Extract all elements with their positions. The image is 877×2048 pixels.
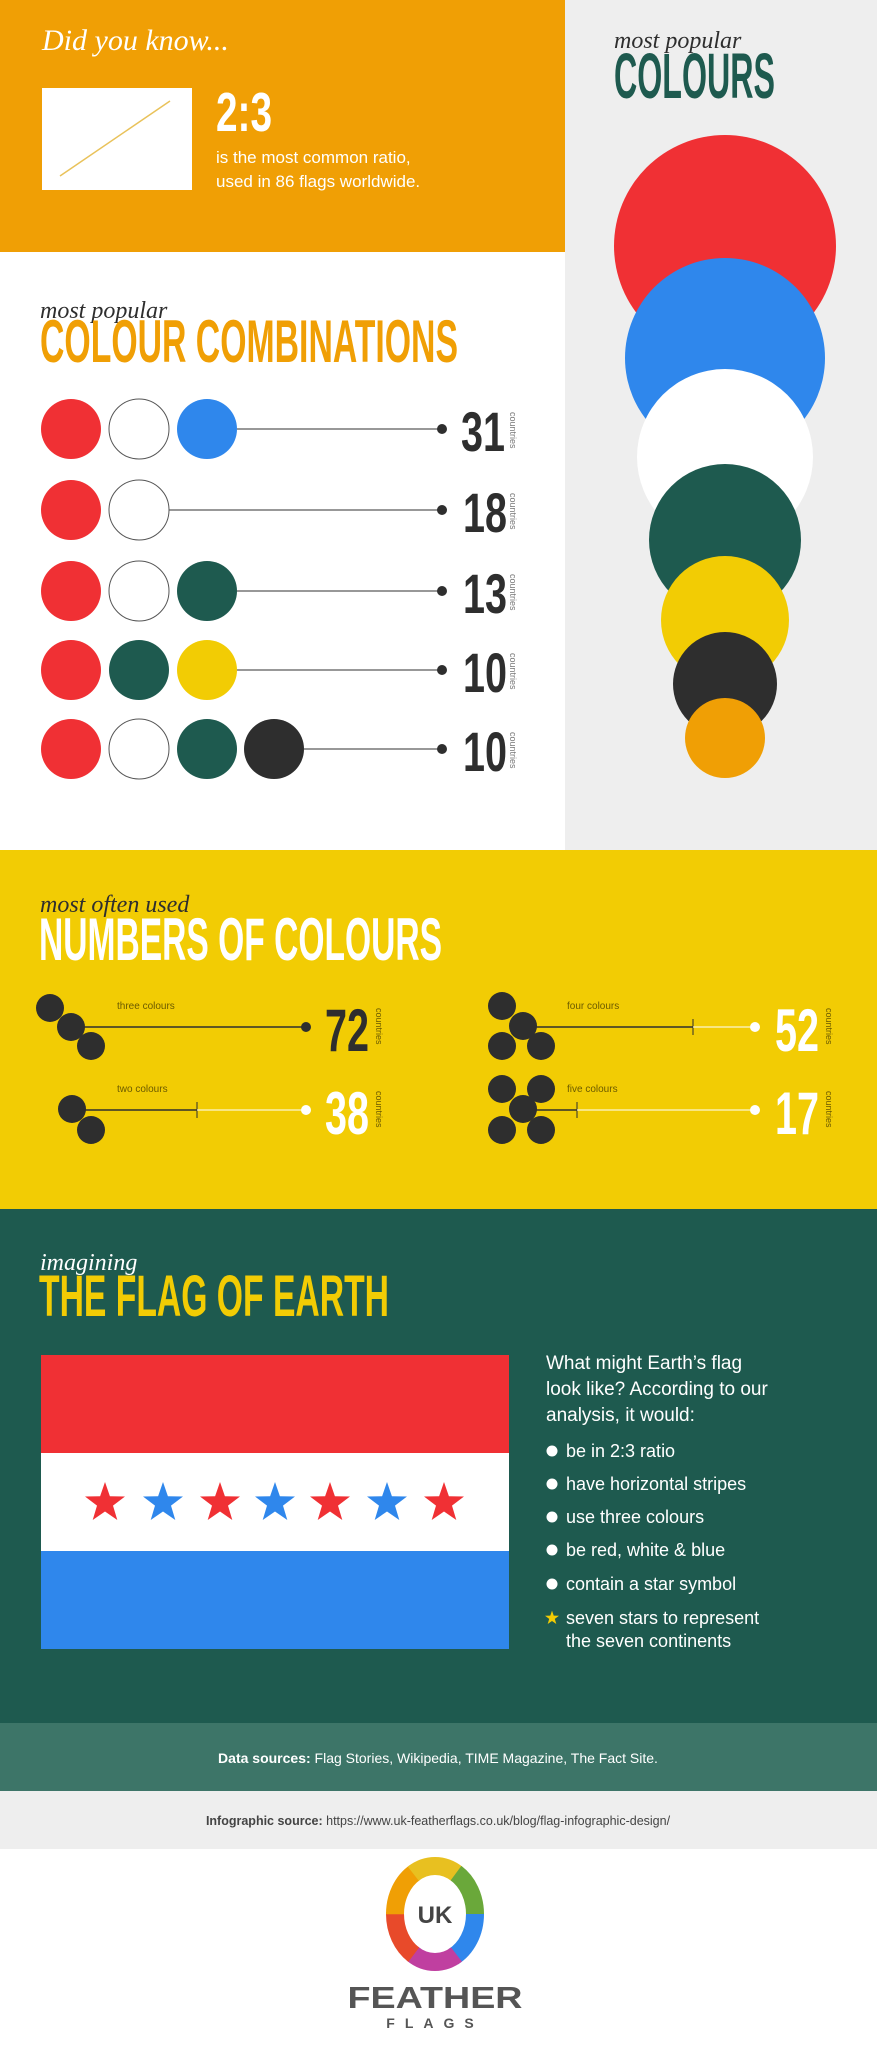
chart: stacked colour circles bbox=[614, 135, 836, 778]
row: five colours 17: five colours bbox=[567, 1084, 618, 1095]
row: four colours 52: 52 bbox=[775, 997, 819, 1064]
panel: colour combinations bbox=[40, 298, 518, 783]
row: three colours 72 bbox=[36, 994, 384, 1064]
text: flag description and list: be red, white & blue bbox=[566, 1540, 725, 1560]
heading: numbers of colours bbox=[39, 892, 442, 973]
row: red white green black 10 bbox=[41, 719, 518, 783]
stat: 2:3: 2:3 bbox=[216, 81, 272, 143]
heading: colour combinations bbox=[40, 298, 458, 375]
heading: numbers of colours: NUMBERS OF COLOURS bbox=[39, 906, 442, 973]
heading: the flag of earth: THE FLAG OF EARTH bbox=[39, 1264, 389, 1329]
row: red white green 13: 13 bbox=[463, 562, 507, 625]
logo: uk feather flags: FLAGS bbox=[386, 2015, 484, 2031]
heading: did you know: Did you know... bbox=[41, 24, 229, 57]
panel: flag of earth bbox=[0, 1209, 877, 1723]
footer: data sources: Data sources: Flag Stories, Wikipedia, TIME Magazine, The Fact Site. bbox=[218, 1750, 658, 1766]
text: flag description and list bbox=[545, 1353, 768, 1651]
text: flag description and list: look like? According to our bbox=[546, 1379, 768, 1400]
panel: did you know bbox=[0, 0, 565, 252]
heading: most popular colours bbox=[614, 28, 775, 112]
row: red green yellow 10: 10 bbox=[463, 641, 507, 704]
heading: numbers of colours: most often used bbox=[40, 892, 190, 918]
row: red white blue 31: countries bbox=[508, 412, 518, 449]
heading: colour combinations: COLOUR COMBINATIONS bbox=[40, 308, 458, 375]
footer: infographic source: Infographic source: https://www.uk-featherflags.co.uk/blog/flag-infographic-design/ bbox=[206, 1814, 671, 1828]
text: flag description and list: seven stars to represent bbox=[566, 1608, 759, 1628]
row: four colours 52: countries bbox=[824, 1008, 834, 1045]
row: red green yellow 10: countries bbox=[508, 653, 518, 690]
row: red white green 13: countries bbox=[508, 574, 518, 611]
panel: most popular colours bbox=[614, 28, 836, 778]
row: red white 18: 18 bbox=[463, 481, 507, 544]
heading: the flag of earth bbox=[39, 1250, 389, 1329]
row: red white 18 bbox=[41, 480, 518, 544]
footer: infographic source bbox=[0, 1791, 877, 1849]
row: red white green black 10: countries bbox=[508, 732, 518, 769]
text: flag description and list: have horizontal stripes bbox=[566, 1474, 746, 1494]
footer: data sources bbox=[0, 1723, 877, 1791]
row: five colours 17: countries bbox=[824, 1091, 834, 1128]
text: ratio description: used in 86 flags worldwide. bbox=[216, 172, 420, 191]
row: red white green black 10: 10 bbox=[463, 720, 507, 783]
logo: uk feather flags: FEATHER bbox=[348, 1980, 522, 2015]
row: three colours 72: three colours bbox=[117, 1001, 175, 1012]
text: flag description and list: the seven continents bbox=[566, 1631, 731, 1651]
panel: numbers of colours bbox=[0, 850, 877, 1209]
logo: uk feather flags: UK bbox=[418, 1902, 453, 1929]
row: two colours 38: countries bbox=[374, 1091, 384, 1128]
row: three colours 72: countries bbox=[374, 1008, 384, 1045]
text: flag description and list: analysis, it would: bbox=[546, 1405, 695, 1426]
row: two colours 38: two colours bbox=[117, 1084, 168, 1095]
row: four colours 52 bbox=[488, 992, 834, 1064]
row: five colours 17 bbox=[488, 1075, 834, 1147]
heading: the flag of earth: imagining bbox=[40, 1250, 137, 1276]
row: two colours 38 bbox=[58, 1080, 384, 1147]
row: red white 18: countries bbox=[508, 493, 518, 530]
heading: most popular colours: most popular bbox=[614, 28, 742, 54]
text: flag description and list: use three colours bbox=[566, 1507, 704, 1527]
heading: colour combinations: most popular bbox=[40, 298, 168, 324]
row: two colours 38: 38 bbox=[325, 1080, 369, 1147]
row: three colours 72: 72 bbox=[325, 997, 369, 1064]
row: red white blue 31 bbox=[41, 399, 518, 463]
icon: flag ratio bbox=[42, 88, 192, 190]
illustration: earth flag bbox=[41, 1355, 509, 1649]
row: red white green 13 bbox=[41, 561, 518, 625]
text: flag description and list: be in 2:3 ratio bbox=[566, 1441, 675, 1461]
row: red green yellow 10 bbox=[41, 640, 518, 704]
row: five colours 17: 17 bbox=[775, 1080, 819, 1147]
text: flag description and list: What might Earth’s flag bbox=[546, 1353, 742, 1374]
row: red white blue 31: 31 bbox=[461, 400, 505, 463]
background: right grey column bbox=[565, 0, 877, 850]
text: flag description and list: contain a star symbol bbox=[566, 1574, 736, 1594]
logo: uk feather flags bbox=[348, 1866, 522, 2031]
row: four colours 52: four colours bbox=[567, 1001, 619, 1012]
text: ratio description: is the most common ratio, bbox=[216, 148, 411, 167]
